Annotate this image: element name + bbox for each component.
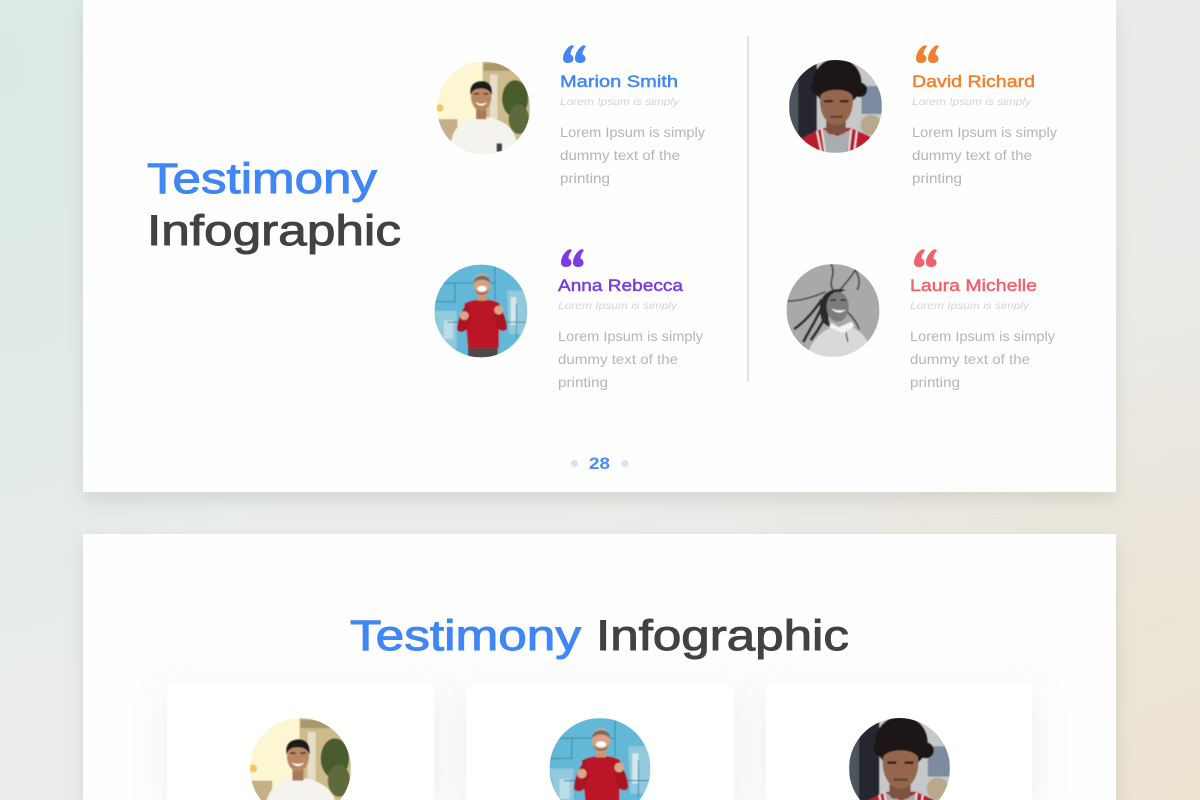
testimonial: David Richard: Lorem Ipsum is simply xyxy=(912,125,1057,140)
testimonial: Marion Smith xyxy=(436,45,705,186)
testimonial: Anna Rebecca: Lorem Ipsum is simply xyxy=(558,300,678,312)
testimonial: David Richard: dummy text of the xyxy=(912,148,1032,163)
testimonial: David Richard: Lorem Ipsum is simply xyxy=(912,96,1032,108)
card: David xyxy=(766,683,1032,800)
testimonial: Laura Michelle: printing xyxy=(910,375,960,390)
title: Testimony Infographic xyxy=(147,155,401,255)
card: Anna xyxy=(466,683,734,800)
testimonial: Marion Smith: Marion Smith xyxy=(560,72,678,91)
testimonial: Laura Michelle: Lorem Ipsum is simply xyxy=(910,300,1030,312)
title: Testimony Infographic: Testimony xyxy=(147,155,378,203)
page number 28 xyxy=(571,454,628,473)
testimonial: Laura Michelle xyxy=(786,249,1055,390)
testimonial: David Richard xyxy=(789,45,1057,186)
title: Testimony Infographic centered: Infographic xyxy=(596,612,849,660)
card: Marion xyxy=(167,683,434,800)
testimonial: Laura Michelle: dummy text of the xyxy=(910,352,1030,367)
testimonial: Anna Rebecca: printing xyxy=(558,375,608,390)
testimonial: Marion Smith: dummy text of the xyxy=(560,148,680,163)
testimonial: Laura Michelle: Laura Michelle xyxy=(910,276,1037,295)
page number 28: 28 xyxy=(589,454,610,473)
panel: bottom slide xyxy=(83,534,1116,800)
testimonial: Anna Rebecca: Anna Rebecca xyxy=(558,276,684,295)
title: Testimony Infographic centered xyxy=(350,612,849,660)
testimonial: Marion Smith: printing xyxy=(560,171,610,186)
testimonial: Anna Rebecca: dummy text of the xyxy=(558,352,678,367)
panel: top slide xyxy=(83,0,1116,492)
testimonial: Marion Smith: Lorem Ipsum is simply xyxy=(560,96,680,108)
title: Testimony Infographic: Infographic xyxy=(147,207,401,255)
title: Testimony Infographic centered: Testimony xyxy=(350,612,582,660)
testimonial: Laura Michelle: Lorem Ipsum is simply xyxy=(910,329,1055,344)
testimonial: Anna Rebecca xyxy=(434,249,703,390)
testimonial: David Richard: David Richard xyxy=(912,72,1035,91)
testimonial: Anna Rebecca: Lorem Ipsum is simply xyxy=(558,329,703,344)
testimonial: David Richard: printing xyxy=(912,171,962,186)
testimonial: Marion Smith: Lorem Ipsum is simply xyxy=(560,125,705,140)
